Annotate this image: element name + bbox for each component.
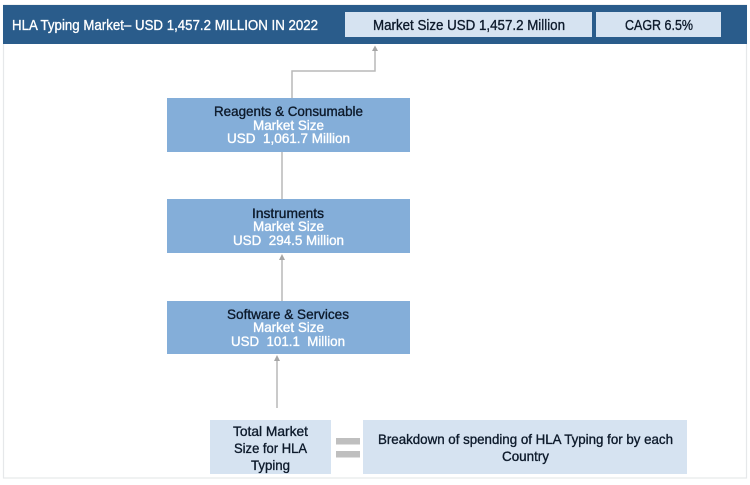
panel: instruments bbox=[167, 199, 410, 253]
panel: total market size: Size for HLA bbox=[234, 440, 308, 456]
CAGR badge bbox=[596, 12, 721, 37]
market size badge: Market Size USD 1,457.2 Million bbox=[373, 17, 565, 34]
panel: instruments: USD 294.5 Million bbox=[233, 232, 344, 248]
panel: instruments: Market Size bbox=[253, 218, 324, 234]
panel: software and services: USD 101.1 Million bbox=[231, 333, 345, 349]
header title: HLA Typing Market– USD 1,457.2 MILLION IN 2022 bbox=[12, 17, 318, 34]
panel: spending breakdown: Breakdown of spending of HLA Typing for by each bbox=[378, 431, 673, 447]
arrow: software to instruments bbox=[279, 254, 285, 301]
arrow: total market to software bbox=[274, 355, 280, 408]
panel: software and services bbox=[167, 301, 410, 354]
header bar bbox=[3, 5, 747, 44]
panel: instruments: Instruments bbox=[252, 205, 324, 221]
panel: spending breakdown bbox=[363, 420, 687, 474]
panel: software and services: Software & Services bbox=[227, 306, 349, 322]
arrow: reagents to market size bbox=[292, 46, 378, 98]
panel: total market size: Typing bbox=[251, 457, 290, 473]
panel: reagents and consumable: Market Size bbox=[253, 117, 324, 133]
panel: reagents and consumable: Reagents & Consumable bbox=[214, 103, 363, 119]
panel: reagents and consumable bbox=[167, 98, 410, 152]
market size badge bbox=[345, 12, 592, 37]
icon: equals sign bbox=[336, 438, 360, 458]
CAGR badge: CAGR 6.5% bbox=[625, 17, 693, 34]
panel: software and services: Market Size bbox=[253, 319, 324, 335]
panel: reagents and consumable: USD 1,061.7 Million bbox=[227, 130, 350, 146]
panel: total market size: Total Market bbox=[233, 423, 308, 439]
panel: spending breakdown: Country bbox=[502, 448, 549, 464]
connector: instruments to reagents bbox=[281, 152, 283, 199]
panel: total market size bbox=[210, 420, 331, 474]
